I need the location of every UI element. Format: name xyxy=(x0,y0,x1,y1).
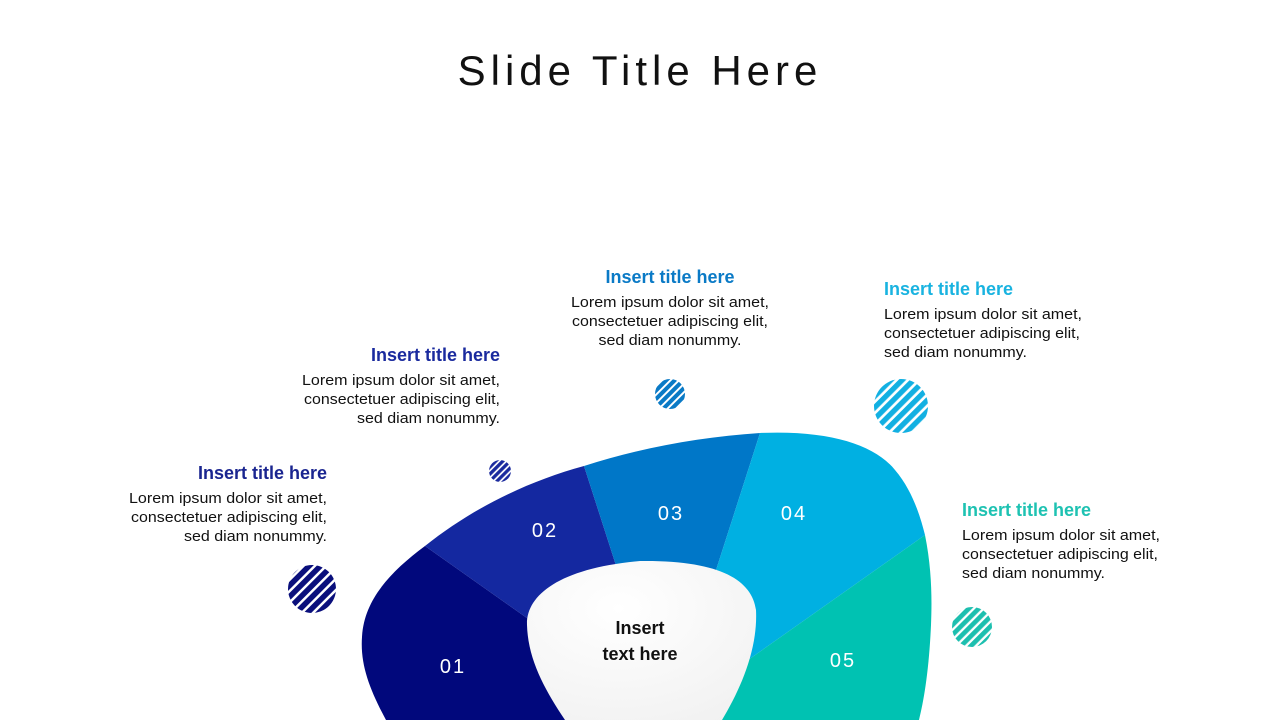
segment numbers: 01 xyxy=(440,656,466,678)
text block 01 xyxy=(129,463,327,545)
segment 03 xyxy=(584,433,760,570)
segment numbers: 04 xyxy=(781,503,807,525)
segment numbers: 05 xyxy=(830,650,856,672)
text block 05: Lorem ipsum dolor sit amet, xyxy=(962,527,1160,544)
text block 01: consectetuer adipiscing elit, xyxy=(131,509,327,526)
text block 02: sed diam nonummy. xyxy=(357,410,500,427)
text block 03: Insert title here xyxy=(605,267,735,287)
segment 04 xyxy=(716,432,925,659)
text block 04: sed diam nonummy. xyxy=(884,344,1027,361)
text block 04: Insert title here xyxy=(884,279,1013,299)
segment 02 xyxy=(425,466,616,618)
center text: text here xyxy=(602,644,678,664)
text block 05: consectetuer adipiscing elit, xyxy=(962,546,1158,563)
center blob xyxy=(527,561,756,720)
text block 01: Insert title here xyxy=(198,463,327,483)
text block 03: consectetuer adipiscing elit, xyxy=(572,313,768,330)
text block 01: Lorem ipsum dolor sit amet, xyxy=(129,490,327,507)
center text xyxy=(602,618,678,664)
center text: Insert xyxy=(615,618,665,638)
text block 02 xyxy=(302,345,500,427)
segment numbers xyxy=(440,503,856,678)
text block 03: Lorem ipsum dolor sit amet, xyxy=(571,294,769,311)
text block 04: Lorem ipsum dolor sit amet, xyxy=(884,306,1082,323)
text block 02: Lorem ipsum dolor sit amet, xyxy=(302,372,500,389)
text block 04: consectetuer adipiscing elit, xyxy=(884,325,1080,342)
text block 02: Insert title here xyxy=(371,345,500,365)
segmented arc diagram xyxy=(362,432,932,720)
text block 03 xyxy=(571,267,769,349)
text block 03: sed diam nonummy. xyxy=(598,332,742,349)
title: Slide Title Here xyxy=(458,47,822,94)
segment numbers: 02 xyxy=(532,520,558,542)
segment 01 xyxy=(362,546,565,720)
segment numbers: 03 xyxy=(658,503,684,525)
text block 04 xyxy=(884,279,1082,361)
segment 05 xyxy=(722,535,932,720)
text block 05: sed diam nonummy. xyxy=(962,565,1105,582)
text block 02: consectetuer adipiscing elit, xyxy=(304,391,500,408)
icon: hatched circles xyxy=(288,379,992,647)
text block 01: sed diam nonummy. xyxy=(184,528,327,545)
text block 05: Insert title here xyxy=(962,500,1091,520)
text block 05 xyxy=(962,500,1160,582)
